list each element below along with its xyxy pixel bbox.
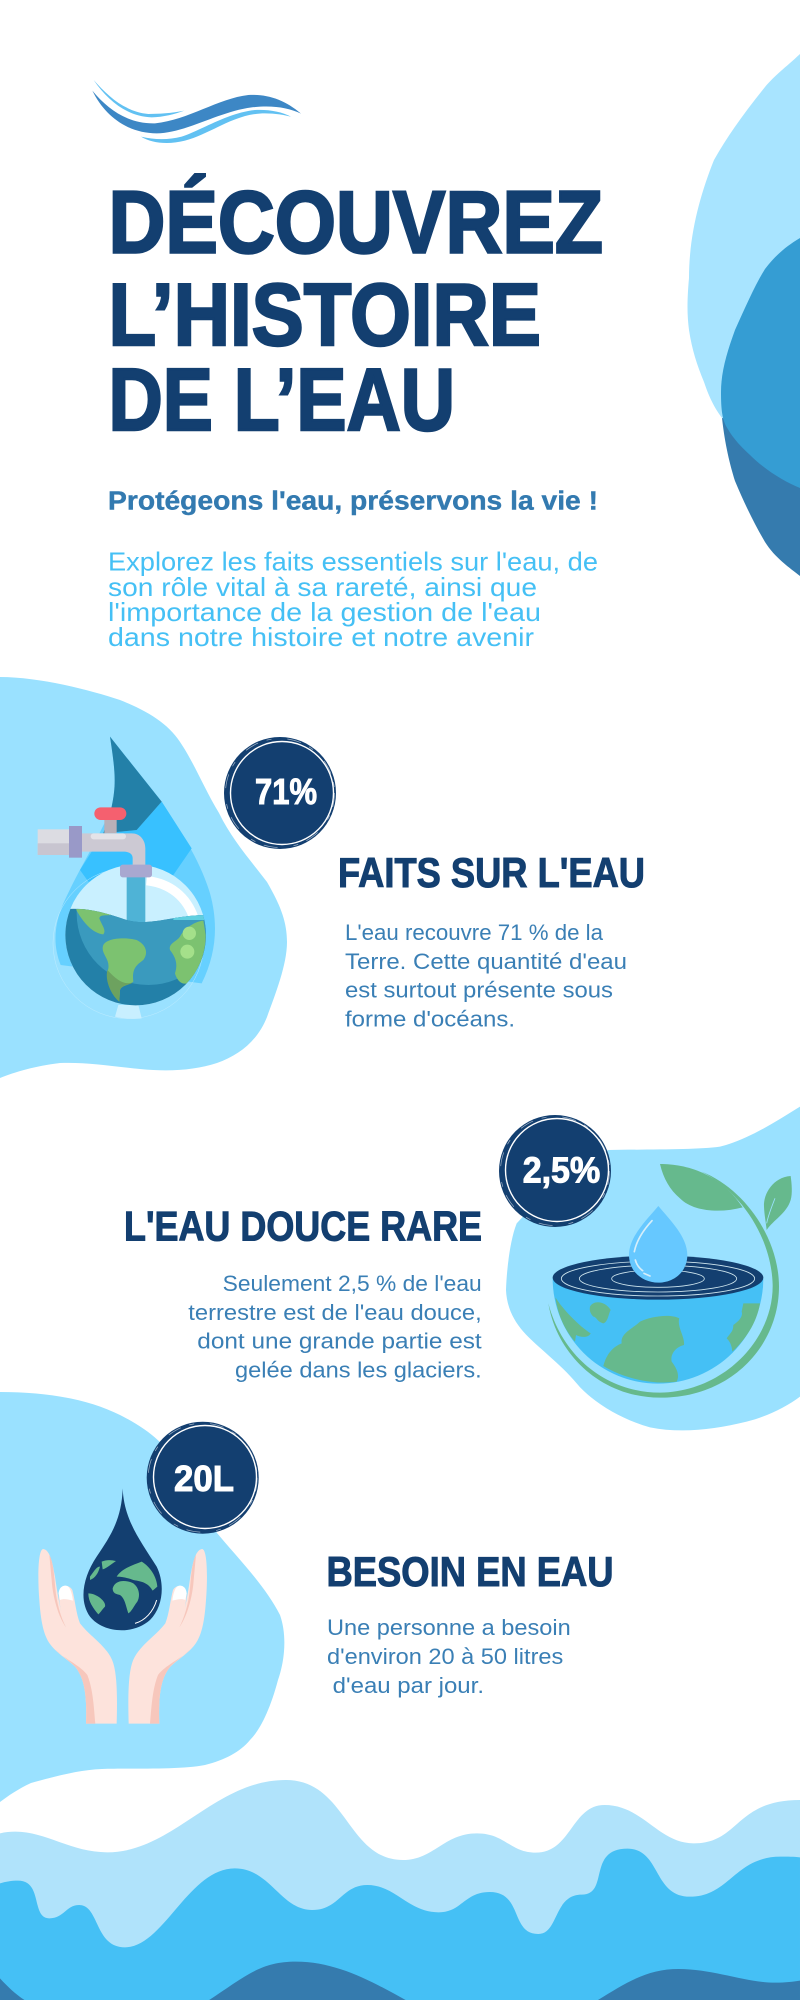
icon: wave logo (92, 80, 301, 143)
title: DÉCOUVREZ (108, 172, 603, 272)
title: L’HISTOIRE (108, 265, 541, 364)
section: besoin en eau: d'eau par jour. (333, 1673, 484, 1698)
section: faits sur l'eau: est surtout présente sous (345, 978, 613, 1003)
title: DE L’EAU (108, 350, 455, 449)
section: besoin en eau: Une personne a besoin (327, 1615, 571, 1640)
section: faits sur l'eau: forme d'océans. (345, 1007, 515, 1032)
section: l'eau douce rare: Seulement 2,5 % de l'eau (223, 1271, 482, 1296)
decorative blob: top right (688, 54, 800, 576)
subtitle: Protégeons l'eau, préservons la vie ! (108, 488, 598, 516)
section: faits sur l'eau: FAITS SUR L'EAU (338, 849, 645, 896)
section: besoin en eau (326, 1548, 614, 1698)
icon: hands holding earth drop (38, 1488, 207, 1724)
panel: blob eau douce (506, 1107, 800, 1430)
badge: 20L (147, 1422, 259, 1534)
section: faits sur l'eau (338, 849, 645, 1032)
badge: 2,5% (499, 1115, 611, 1227)
section: besoin en eau: d'environ 20 à 50 litres (327, 1644, 563, 1669)
section: faits sur l'eau: L'eau recouvre 71 % de la (345, 920, 603, 945)
decorative waves: bottom (0, 1780, 800, 2000)
badge: 2,5%: 2,5% (523, 1150, 600, 1191)
panel: blob besoin en eau (0, 1392, 284, 1802)
intro text: dans notre histoire et notre avenir (108, 622, 534, 652)
icon: faucet over globe in water drop (38, 737, 220, 1019)
badge: 20L: 20L (174, 1458, 234, 1499)
intro text: son rôle vital à sa rareté, ainsi que (108, 572, 537, 602)
section: l'eau douce rare (124, 1203, 483, 1383)
title (108, 172, 603, 449)
badge: 71% (224, 737, 336, 849)
section: besoin en eau: BESOIN EN EAU (326, 1548, 614, 1595)
section: faits sur l'eau: Terre. Cette quantité d'eau (345, 949, 627, 974)
panel: blob faits sur l'eau (0, 677, 287, 1078)
section: l'eau douce rare: dont une grande partie est (197, 1329, 483, 1354)
intro text (108, 547, 598, 652)
badge: 71%: 71% (255, 771, 317, 812)
icon: half globe with drop and leaves (548, 1164, 792, 1398)
intro text: l'importance de la gestion de l'eau (108, 597, 541, 627)
section: l'eau douce rare: terrestre est de l'eau douce, (188, 1300, 482, 1325)
intro text: Explorez les faits essentiels sur l'eau, de (108, 547, 598, 577)
section: l'eau douce rare: gelée dans les glaciers. (235, 1358, 482, 1383)
section: l'eau douce rare: L'EAU DOUCE RARE (124, 1203, 482, 1250)
